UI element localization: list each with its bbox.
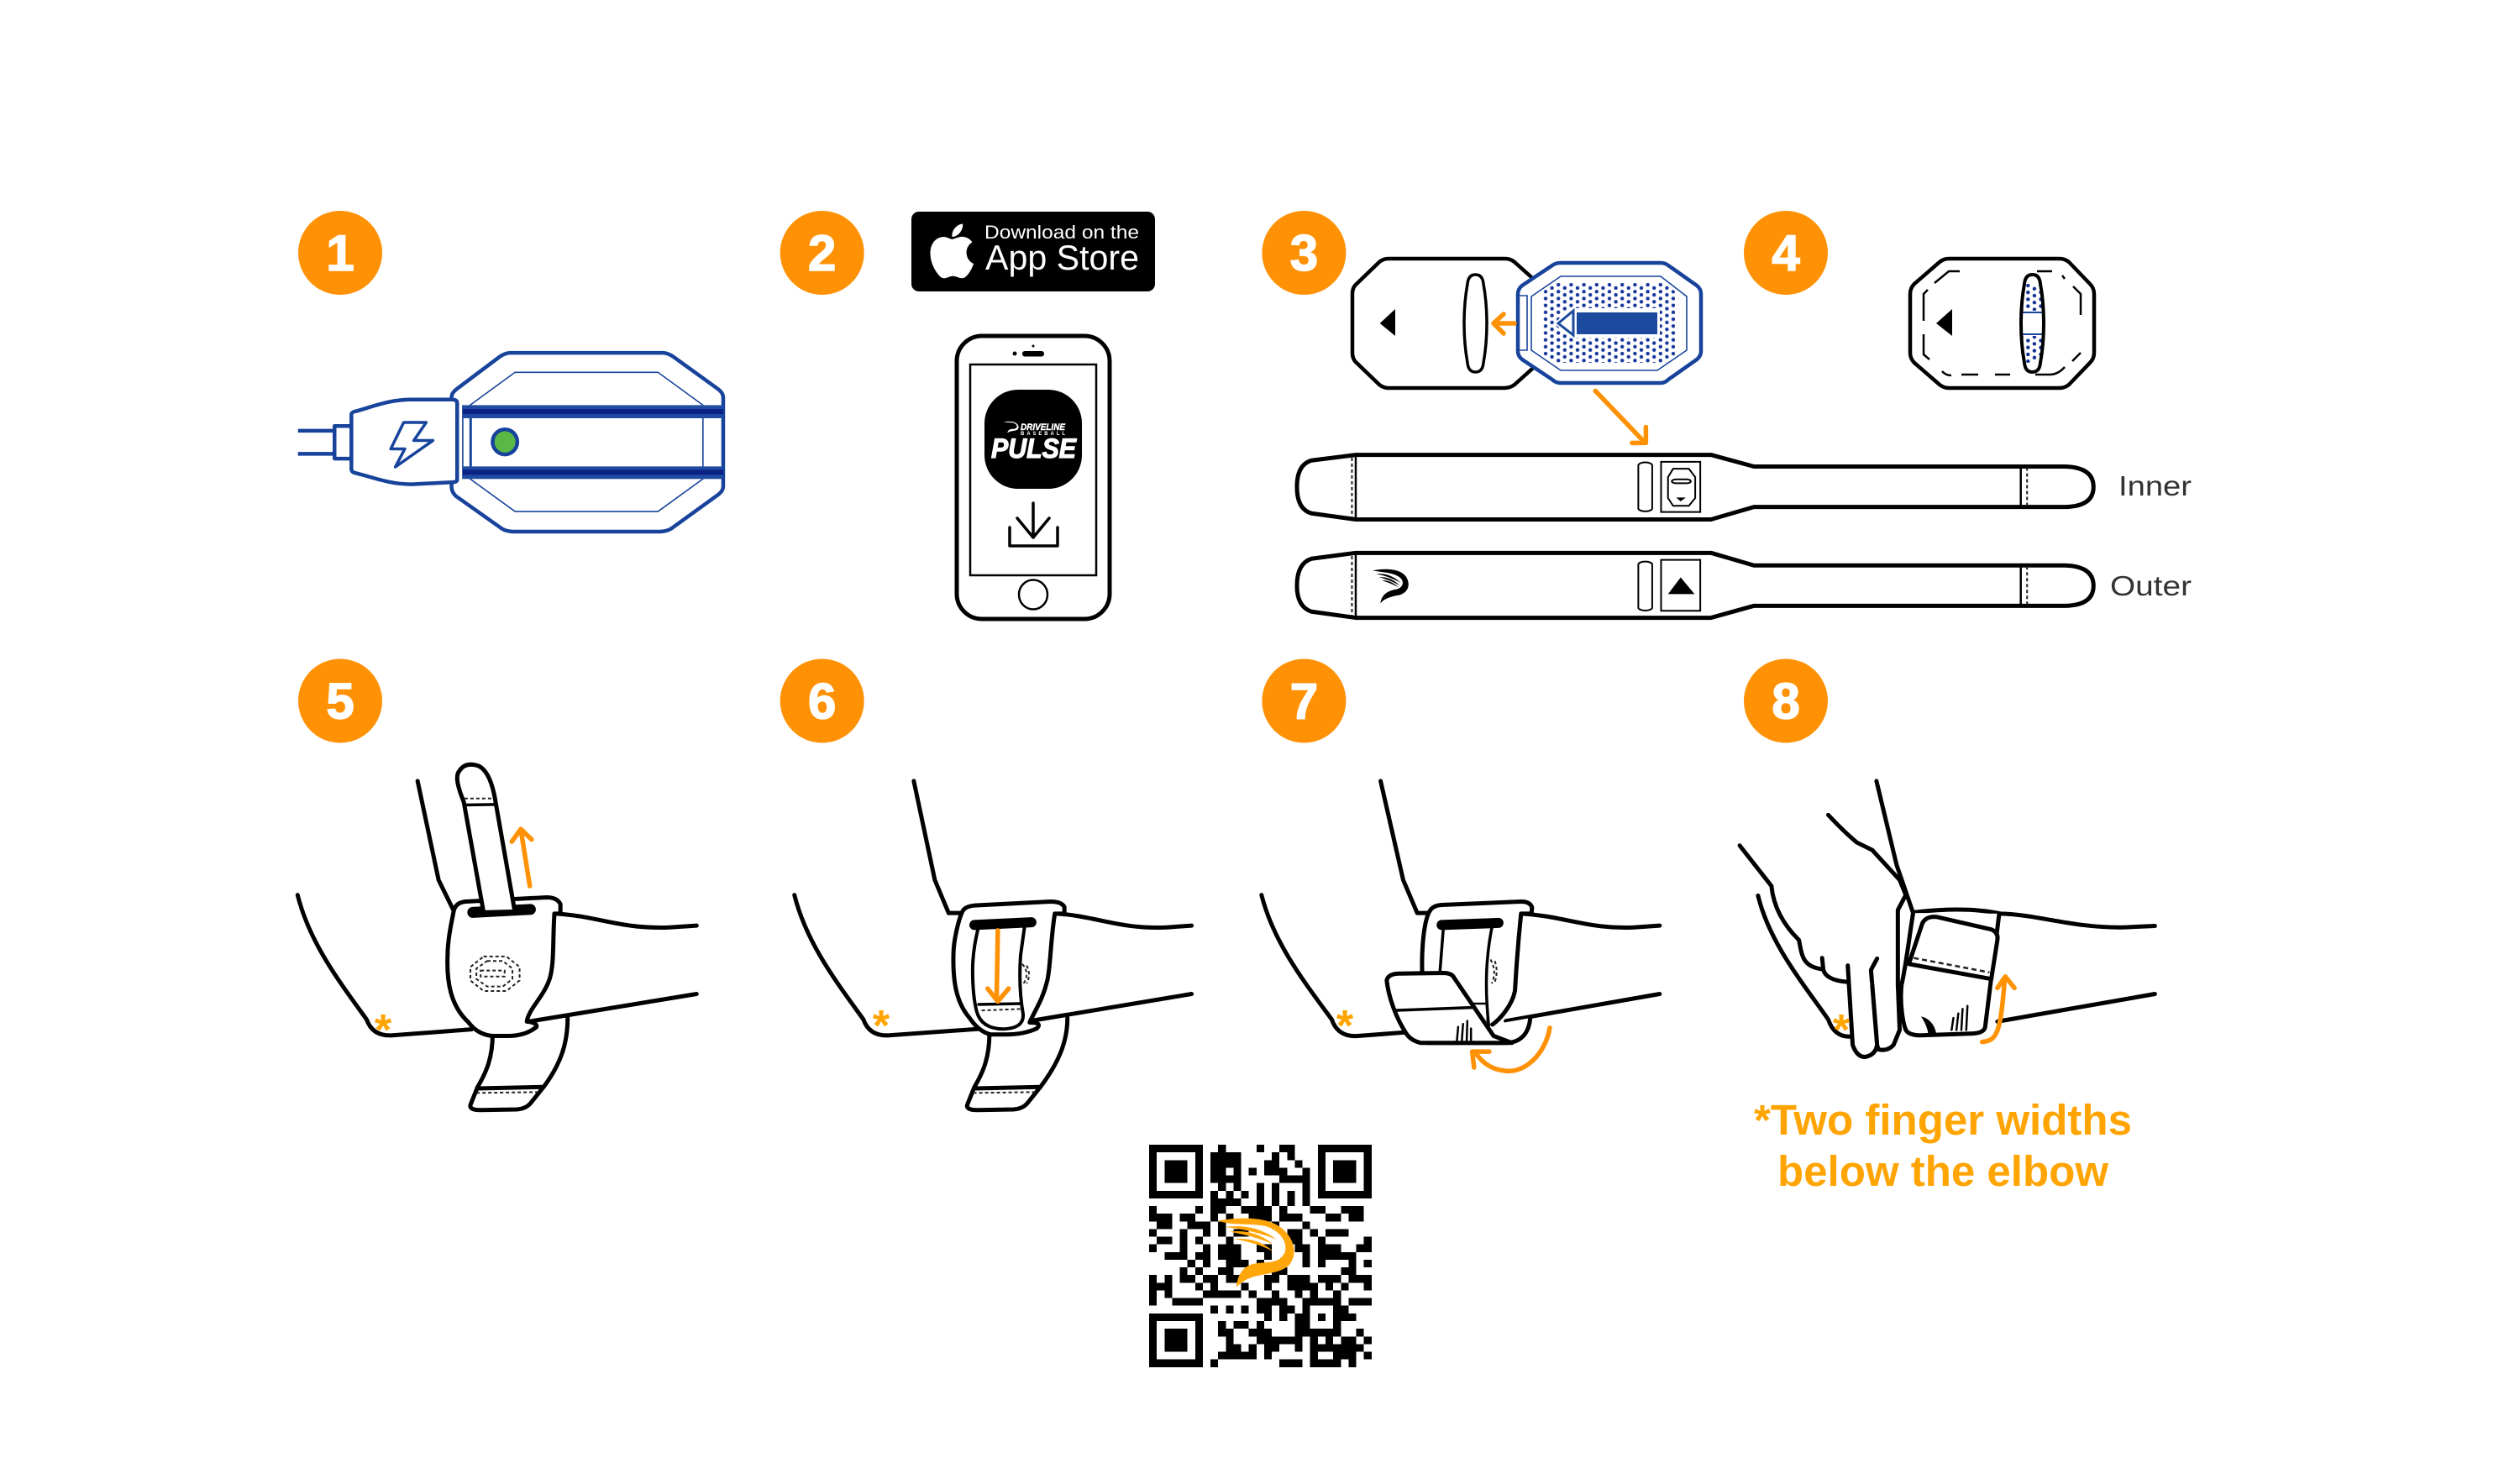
arm outline xyxy=(1758,781,2155,1036)
outer strap xyxy=(1297,553,2093,618)
icon: download xyxy=(1010,503,1058,546)
step 1 number badge xyxy=(298,211,382,295)
step 8 number badge xyxy=(1744,658,1828,742)
curved arrow xyxy=(1473,1028,1550,1071)
step 2 number badge: 2 xyxy=(808,225,836,281)
step 1 number badge: 1 xyxy=(326,225,354,281)
step 8: two finger placement xyxy=(1740,781,2155,1057)
step 4: sensor seated in pad xyxy=(1910,259,2094,388)
inner strap xyxy=(1297,455,2093,520)
elbow band xyxy=(953,902,1064,1035)
strap pulled upward xyxy=(457,764,515,912)
logo: black swoosh xyxy=(1373,569,1409,603)
arm outline xyxy=(1262,781,1660,1036)
step 1: sensor with charging cable xyxy=(298,353,723,532)
app icon: Driveline Pulse: BASEBALL xyxy=(1021,432,1065,437)
band behind xyxy=(1422,902,1532,1043)
asterisk marker: * xyxy=(375,1006,392,1055)
arrow up xyxy=(512,829,532,886)
folded strap xyxy=(973,922,1032,1029)
sensor body xyxy=(452,353,723,532)
step 3 number badge xyxy=(1262,211,1346,295)
arrow down xyxy=(988,931,1009,1001)
step 6: strap folded down xyxy=(795,781,1192,1110)
charging plug xyxy=(298,400,457,485)
asterisk marker: * xyxy=(1833,1006,1851,1055)
status LED xyxy=(492,429,517,454)
buckle slot xyxy=(473,910,530,912)
App Store badge xyxy=(911,212,1155,291)
blue sensor with dot pattern xyxy=(1518,263,1701,383)
asterisk marker: * xyxy=(873,1002,890,1051)
folded flap xyxy=(1387,973,1512,1043)
pressing hand xyxy=(1740,815,1906,1057)
lower strap end xyxy=(967,1018,1068,1110)
label: Outer: Outer xyxy=(2110,570,2192,601)
note: two finger widths xyxy=(1754,1096,2132,1195)
step 8 number badge: 8 xyxy=(1772,674,1800,729)
step 6 number badge: 6 xyxy=(808,674,836,729)
QR code with logo xyxy=(1149,1145,1372,1367)
arrow up xyxy=(1982,977,2014,1042)
step 3: sensor into pad and strap xyxy=(1297,259,2192,618)
App Store badge: App Store xyxy=(985,238,1139,277)
fitted band xyxy=(1901,913,1999,1036)
step 5 number badge: 5 xyxy=(326,674,354,729)
step 7 number badge: 7 xyxy=(1290,674,1318,729)
app icon: Driveline Pulse xyxy=(984,390,1082,489)
note: two finger widths: *Two finger widths xyxy=(1754,1096,2132,1144)
dashed sensor outline xyxy=(470,957,520,991)
step 5 number badge xyxy=(298,658,382,742)
step 5: arm with strap pulled through xyxy=(297,764,696,1110)
lower strap end xyxy=(470,1018,568,1110)
step 3 number badge: 3 xyxy=(1290,225,1318,281)
phone with app icon and download arrow xyxy=(957,336,1110,619)
step 6 number badge xyxy=(780,658,864,742)
note: two finger widths: below the elbow xyxy=(1777,1147,2108,1195)
step 4 number badge xyxy=(1744,211,1828,295)
elbow band xyxy=(448,898,560,1036)
step 2 number badge xyxy=(780,211,864,295)
label: Inner: Inner xyxy=(2118,470,2192,501)
logo: orange swoosh xyxy=(1218,1219,1294,1287)
arm outline xyxy=(795,781,1192,1036)
step 7: strap folding around xyxy=(1262,781,1660,1071)
black sleeve pad xyxy=(1352,259,1539,388)
app icon: Driveline Pulse: DRIVELINE xyxy=(1021,422,1066,433)
App Store badge: Download on the xyxy=(984,222,1139,243)
asterisk marker: * xyxy=(1336,1002,1354,1051)
inner strap xyxy=(1440,923,1499,1025)
step 4 number badge: 4 xyxy=(1772,225,1800,281)
step 7 number badge xyxy=(1262,658,1346,742)
app icon: Driveline Pulse: PULSE xyxy=(991,433,1078,464)
arm outline xyxy=(297,781,696,1036)
orange arrows xyxy=(1494,314,1646,443)
